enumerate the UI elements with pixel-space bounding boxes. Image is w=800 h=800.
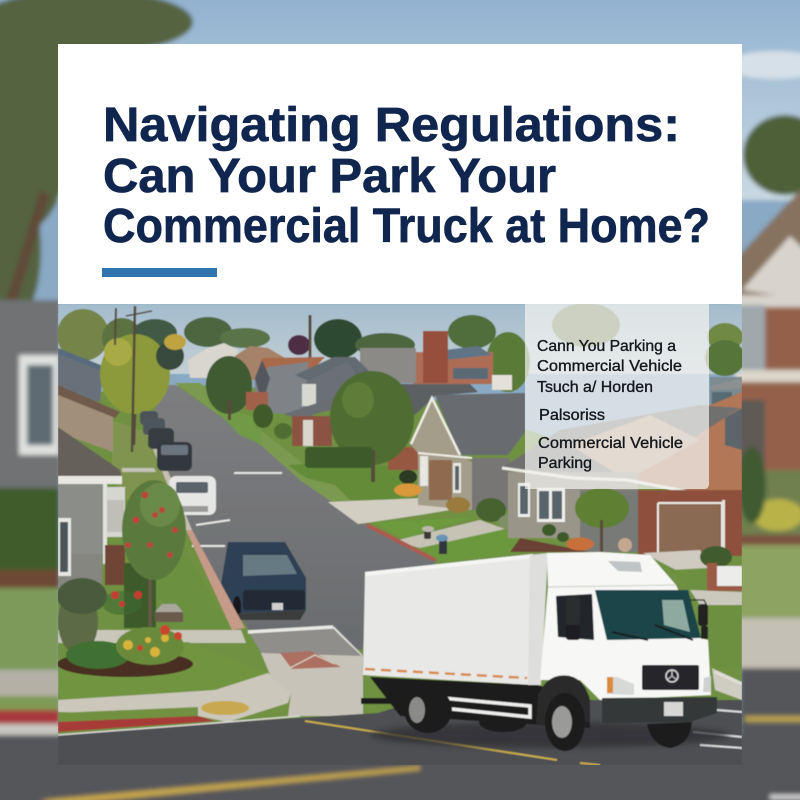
panel text: Palsoriss xyxy=(539,407,605,424)
chassis xyxy=(370,677,590,728)
street xyxy=(146,385,437,650)
title: Can Your Park Your xyxy=(103,150,556,203)
centre tree and shrubs xyxy=(330,371,414,465)
right wing and garage xyxy=(510,405,740,472)
title: Navigating Regulations: xyxy=(103,99,680,152)
bumper xyxy=(602,697,717,723)
delivery truck xyxy=(361,552,730,751)
tree line xyxy=(57,303,745,392)
intersection road xyxy=(58,700,742,765)
left houses xyxy=(58,354,102,402)
gable house xyxy=(397,384,478,415)
crosswalk apron xyxy=(250,629,362,656)
base ground xyxy=(58,385,742,765)
front shrubs and tree xyxy=(575,488,629,528)
grille and logo xyxy=(642,665,699,690)
headlights xyxy=(607,677,634,695)
windshield xyxy=(595,590,701,640)
title xyxy=(103,99,710,253)
title card xyxy=(58,44,742,304)
front wheel xyxy=(536,675,590,751)
upper trees xyxy=(134,380,136,445)
sidewalk and curb xyxy=(58,673,291,722)
panel text xyxy=(537,338,683,472)
foreground beds xyxy=(58,630,246,643)
mirrors xyxy=(566,597,580,625)
panel text: Tsuch a/ Horden xyxy=(537,379,653,396)
title: Commercial Truck at Home? xyxy=(103,200,710,253)
panel text: Commercial Vehicle xyxy=(538,435,683,452)
front yard lawn xyxy=(118,553,231,630)
far side wheels xyxy=(647,722,692,748)
road markings xyxy=(192,473,282,546)
translucent text panel xyxy=(525,304,709,489)
accent bar xyxy=(102,268,217,277)
side guard xyxy=(442,698,530,717)
neighbourhood street photo xyxy=(57,303,745,765)
sky xyxy=(58,304,742,374)
left verge xyxy=(112,421,166,500)
cargo box xyxy=(363,554,533,685)
panel text: Parking xyxy=(538,455,592,472)
side window xyxy=(556,594,594,640)
distant houses xyxy=(188,343,238,378)
parked cars xyxy=(140,411,158,425)
right verge lawns and walks xyxy=(175,383,365,525)
panel text: Cann You Parking a xyxy=(537,338,676,355)
cab body xyxy=(540,552,711,700)
young tree with flowers xyxy=(122,480,186,626)
truck shadow xyxy=(370,722,730,748)
grey houses at centre xyxy=(262,356,326,370)
panel text: Commercial Vehicle xyxy=(537,358,682,375)
rear wheel xyxy=(404,695,453,734)
